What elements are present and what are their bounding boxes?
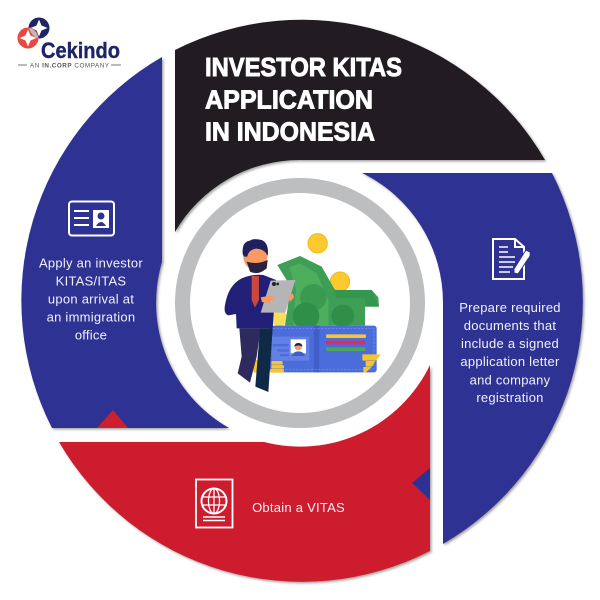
panel: obtain VITAS red segment — [59, 365, 430, 582]
logo — [18, 18, 121, 70]
coins stack right — [362, 354, 381, 373]
coin middle — [330, 272, 350, 291]
text: prepare documents: and company — [470, 372, 551, 388]
title: INVESTOR KITAS — [205, 52, 402, 82]
logo: Cekindo — [41, 38, 120, 63]
text: obtain VITAS: Obtain a VITAS — [252, 500, 345, 515]
red triangle marker — [97, 410, 128, 428]
title: IN INDONESIA — [205, 116, 375, 146]
text: apply KITAS: Apply an investor — [39, 256, 143, 270]
coin lower — [271, 310, 287, 326]
icon: passport — [196, 480, 232, 528]
center illustration: investor with wallet and money — [225, 234, 381, 392]
logo: AN IN.CORP COMPANY — [30, 62, 110, 70]
panel: prepare documents blue segment — [362, 173, 583, 544]
text: apply KITAS — [39, 256, 143, 342]
icon: ID card — [69, 202, 114, 236]
man — [225, 239, 295, 392]
text: apply KITAS: office — [75, 328, 107, 342]
text: prepare documents: documents that — [464, 318, 556, 333]
coin top — [308, 234, 327, 253]
text: apply KITAS: upon arrival at — [48, 292, 134, 306]
text: prepare documents — [459, 300, 561, 405]
wallet — [269, 326, 377, 372]
panel: title black segment — [175, 20, 545, 232]
banknotes — [277, 256, 379, 329]
text: prepare documents: application letter — [460, 354, 560, 369]
coins stack left — [253, 360, 284, 373]
blue triangle marker — [412, 468, 430, 500]
text: prepare documents: Prepare required — [459, 300, 561, 315]
panel: apply KITAS blue segment — [21, 57, 229, 428]
text: apply KITAS: an immigration — [47, 310, 135, 324]
text: apply KITAS: KITAS/ITAS — [56, 274, 126, 288]
title — [205, 52, 402, 146]
text: prepare documents: registration — [476, 390, 544, 405]
text: prepare documents: include a signed — [461, 336, 559, 351]
center ring — [182, 186, 418, 420]
title: APPLICATION — [205, 84, 373, 114]
icon: document with pen — [493, 239, 530, 279]
